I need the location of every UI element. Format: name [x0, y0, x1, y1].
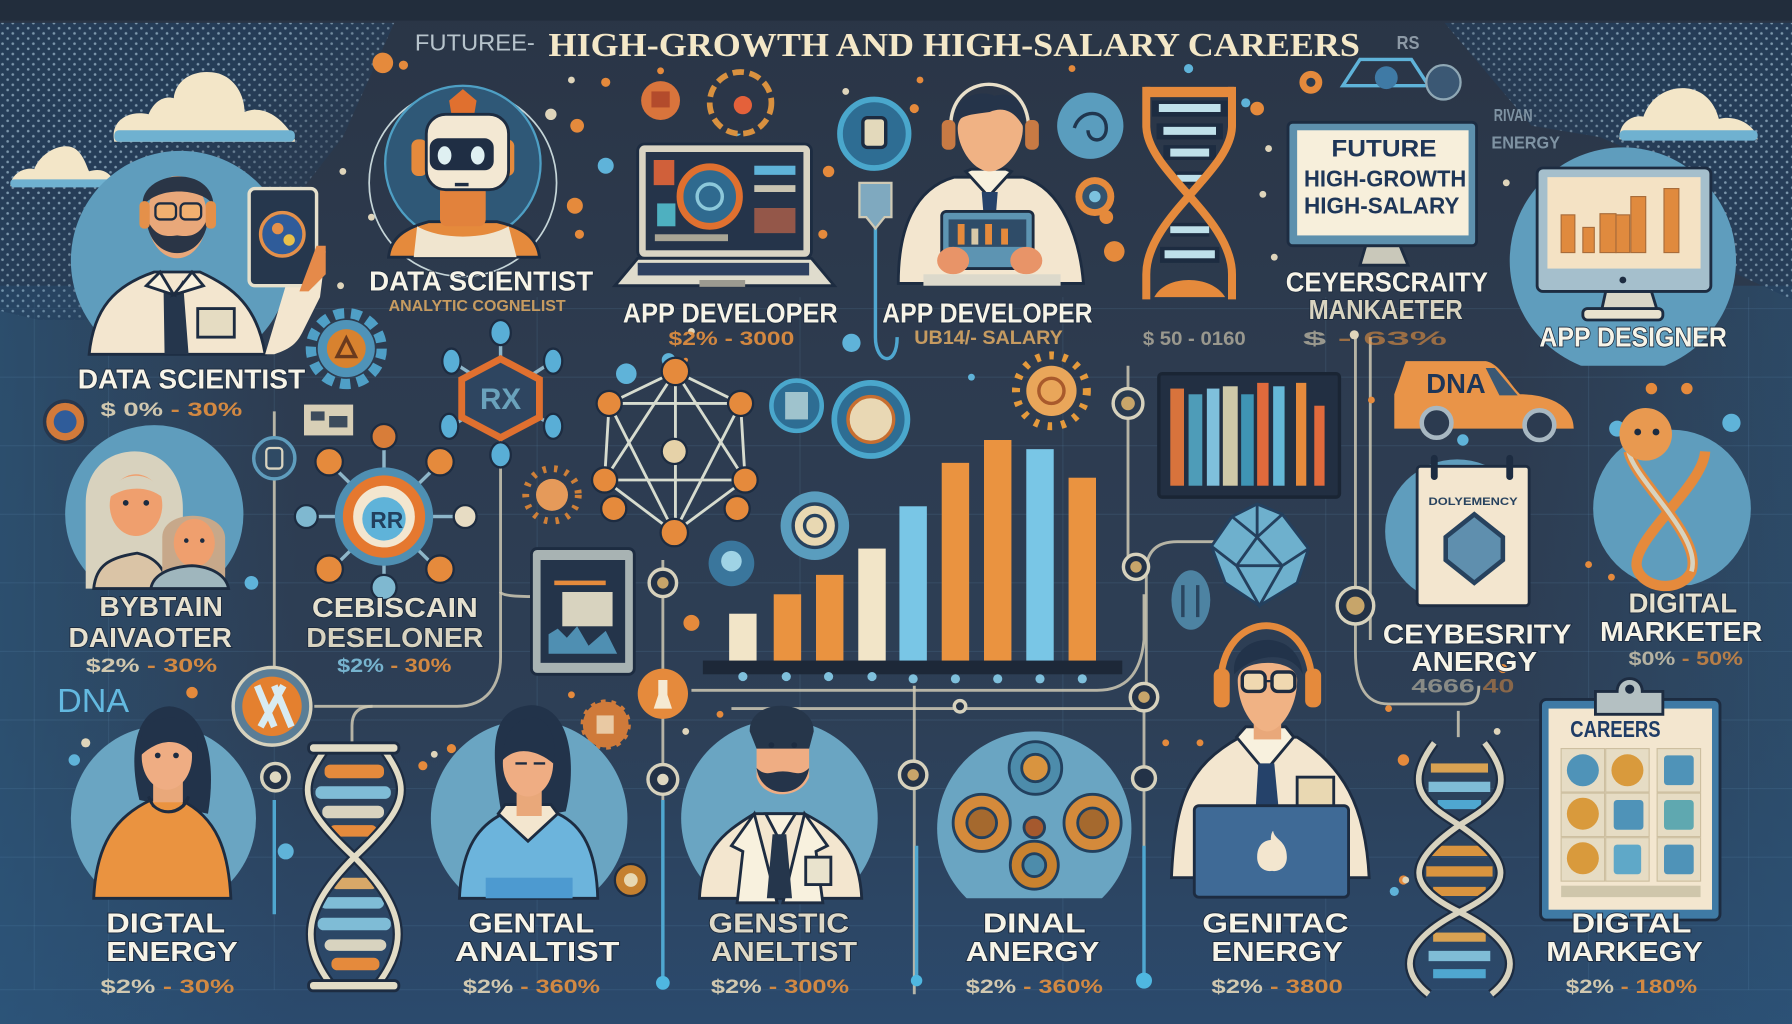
- label: app designer: APP DESIGNER: [1539, 321, 1727, 352]
- text: rivan energy: [1491, 105, 1561, 153]
- label: digital marketer: DIGITAL: [1629, 588, 1737, 619]
- label: genetic analyst 2: ANELTIST: [711, 936, 857, 967]
- label: cybersecurity energy: [1383, 618, 1571, 698]
- icon: hexagon network: RX: [480, 383, 521, 416]
- icon: blue capsule: [1171, 570, 1210, 630]
- text: DNA: DNA: [57, 683, 130, 720]
- label: cybersecurity energy: CEYBESRITY: [1383, 618, 1571, 649]
- panel: genetic energy man with laptop: [1171, 626, 1369, 897]
- icon: central network: RR: [370, 507, 404, 533]
- halftone pattern: top right: [1445, 23, 1792, 299]
- icon: flask node: [638, 669, 688, 719]
- label: blockchain developer: [69, 591, 232, 677]
- label: data scientist: DATA SCIENTIST: [78, 364, 305, 395]
- label: digital energy 2: $2% - 360%: [966, 976, 1103, 998]
- label: genetic energy: GENITAC: [1202, 908, 1349, 939]
- label: cybersecurity marketer: CEYERSCRAITY: [1286, 266, 1488, 297]
- text: rivan energy: RIVAN: [1494, 105, 1533, 125]
- connector ring nodes: [262, 554, 1374, 794]
- label: digital energy 2: DINAL: [983, 908, 1086, 939]
- icon: calendar document: [1385, 455, 1529, 606]
- scattered particles: [69, 53, 1741, 896]
- icon: small data panel: [1159, 374, 1339, 497]
- label: data scientist 2: ANALYTIC COGNELIST: [389, 298, 566, 315]
- label: digital energy 2: [966, 908, 1103, 998]
- label: cybersecurity marketer: $ - 63%: [1303, 328, 1447, 350]
- label: app developer 2: UB14/- SALARY: [914, 327, 1063, 349]
- text: monitor screen: [1304, 136, 1466, 219]
- text: monitor screen: HIGH-GROWTH: [1304, 165, 1466, 191]
- icon: star network: [592, 358, 758, 546]
- label: data scientist 2: [369, 265, 593, 315]
- label: genetic analyst 2: $2% - 300%: [711, 976, 849, 998]
- title: RS: [1397, 32, 1419, 53]
- icon: tablet with document: [531, 549, 634, 674]
- label: genetic energy: ENERGY: [1211, 936, 1343, 967]
- title: HIGH-GROWTH AND HIGH-SALARY CAREERS: [549, 26, 1360, 64]
- icon: robot: [369, 86, 557, 277]
- label: app developer 1: $2% - 3000: [669, 328, 794, 350]
- icon: orange sun center: [1016, 355, 1087, 426]
- icon: gear: [311, 313, 382, 384]
- label: digital energy 2: ANERGY: [966, 936, 1099, 967]
- label: blockchain designer: DESELONER: [306, 622, 484, 653]
- cloud: top left small: [10, 146, 117, 187]
- panel: data scientist with tablet: [71, 151, 326, 370]
- icon: photo card: [304, 405, 353, 435]
- icon: left DNA helix: [308, 743, 401, 991]
- bar chart: main growth: [703, 440, 1122, 683]
- label: app developer 2: [882, 297, 1093, 349]
- text: rivan energy: ENERGY: [1491, 133, 1561, 153]
- icon: orange sun left: [526, 469, 578, 521]
- cloud: top right: [1619, 88, 1758, 141]
- icon: careers clipboard: CAREERS: [1570, 716, 1661, 742]
- label: genetic analyst 2: [709, 908, 857, 998]
- label: digital marketing: DIGTAL: [1571, 908, 1691, 939]
- icon: blue crystal: [1211, 504, 1309, 606]
- panel: digital marketer: [1593, 408, 1751, 587]
- label: blockchain designer: $2% - 30%: [337, 655, 451, 677]
- icon: hexagon network: [440, 320, 562, 467]
- panel: digital energy woman: [71, 706, 256, 911]
- panel: genetic analyst woman: [431, 705, 627, 917]
- label: cybersecurity energy: ANERGY: [1411, 646, 1537, 677]
- label: cybersecurity marketer: MANKAETER: [1309, 294, 1463, 325]
- halftone pattern: top left: [0, 23, 394, 343]
- label: digital energy: DIGTAL: [106, 908, 225, 939]
- icon: monitor with future high-growth text: [1288, 122, 1477, 265]
- icon: calendar document: DOLYEMENCY: [1429, 496, 1518, 508]
- label: blockchain developer: $2% - 30%: [86, 655, 217, 677]
- label: genetic analyst 2: GENSTIC: [709, 908, 849, 939]
- icon: tablet: [249, 189, 326, 354]
- icon: right DNA helix: [1410, 743, 1510, 994]
- label: digital marketer: [1600, 588, 1762, 670]
- label: digital marketing: [1546, 908, 1703, 998]
- label: genetic energy: $2% - 3800: [1211, 976, 1343, 998]
- label: app developer 1: [623, 297, 838, 350]
- label: genetic energy: [1202, 908, 1349, 998]
- icon: badge circles: [641, 72, 1123, 216]
- icon: orange badge: [583, 702, 629, 747]
- label: digital marketer: $0% - 50%: [1629, 648, 1743, 670]
- label: blockchain designer: CEBISCAIN: [312, 592, 478, 623]
- panel: genetic analyst man: [681, 706, 878, 917]
- label: digital marketing: MARKEGY: [1546, 936, 1703, 967]
- label: app developer 1: APP DEVELOPER: [623, 297, 838, 328]
- label: digital marketer: MARKETER: [1600, 616, 1762, 647]
- label: genetic analyst 1: ANALTIST: [455, 936, 620, 967]
- label: digital energy: [101, 908, 238, 998]
- bar chart: monitor: [1561, 189, 1679, 253]
- icon: top right eye emblem: [1299, 59, 1461, 99]
- icon: central network: [295, 424, 477, 600]
- text: monitor screen: HIGH-SALARY: [1304, 193, 1459, 219]
- label: blockchain developer: BYBTAIN: [99, 591, 223, 622]
- icon: orange DNA helix: [1145, 87, 1234, 299]
- icon: small badges left: [45, 401, 295, 479]
- label: data scientist: [78, 364, 305, 421]
- label: genetic analyst 1: [455, 908, 620, 998]
- label: cybersecurity energy: 4666 40: [1411, 676, 1514, 698]
- cloud: top left large: [114, 72, 295, 142]
- icon: small badge: [615, 864, 647, 896]
- icon: laptop: [615, 144, 834, 287]
- icon grid: [1561, 749, 1701, 897]
- connector lines: [274, 183, 1479, 994]
- label: app developer 2: APP DEVELOPER: [882, 297, 1093, 328]
- title: FUTUREE-: [415, 29, 535, 55]
- label: data scientist 2: DATA SCIENTIST: [369, 265, 593, 296]
- label: digital energy: $2% - 30%: [101, 976, 234, 998]
- label: digital marketing: $2% - 180%: [1566, 976, 1697, 998]
- label: blockchain designer: [306, 592, 484, 677]
- label: genetic analyst 1: GENTAL: [469, 908, 594, 939]
- text: monitor screen: FUTURE: [1331, 136, 1437, 163]
- label: data scientist: $ 0% - 30%: [101, 399, 242, 421]
- icon: DNA van: DNA: [1426, 368, 1486, 399]
- icon: analytics monitor in circle: [1510, 147, 1736, 374]
- label: cybersecurity marketer: $ 50 - 0160: [1143, 328, 1246, 350]
- icon: man with tablet: [71, 151, 290, 370]
- panel: two women in circle: [65, 425, 243, 603]
- panel: digital energy coins: [937, 732, 1132, 898]
- label: cybersecurity marketer: [1143, 266, 1488, 350]
- icon: careers clipboard: [1541, 679, 1720, 920]
- icon: headset developer: [898, 84, 1083, 286]
- icon: DNA van: [1394, 361, 1574, 440]
- label: genetic analyst 1: $2% - 360%: [463, 976, 600, 998]
- label: blockchain developer: DAIVAOTER: [69, 622, 232, 653]
- label: digital energy: ENERGY: [106, 936, 238, 967]
- icon: round badges: [709, 381, 1143, 586]
- icon: lambda node: [233, 667, 311, 745]
